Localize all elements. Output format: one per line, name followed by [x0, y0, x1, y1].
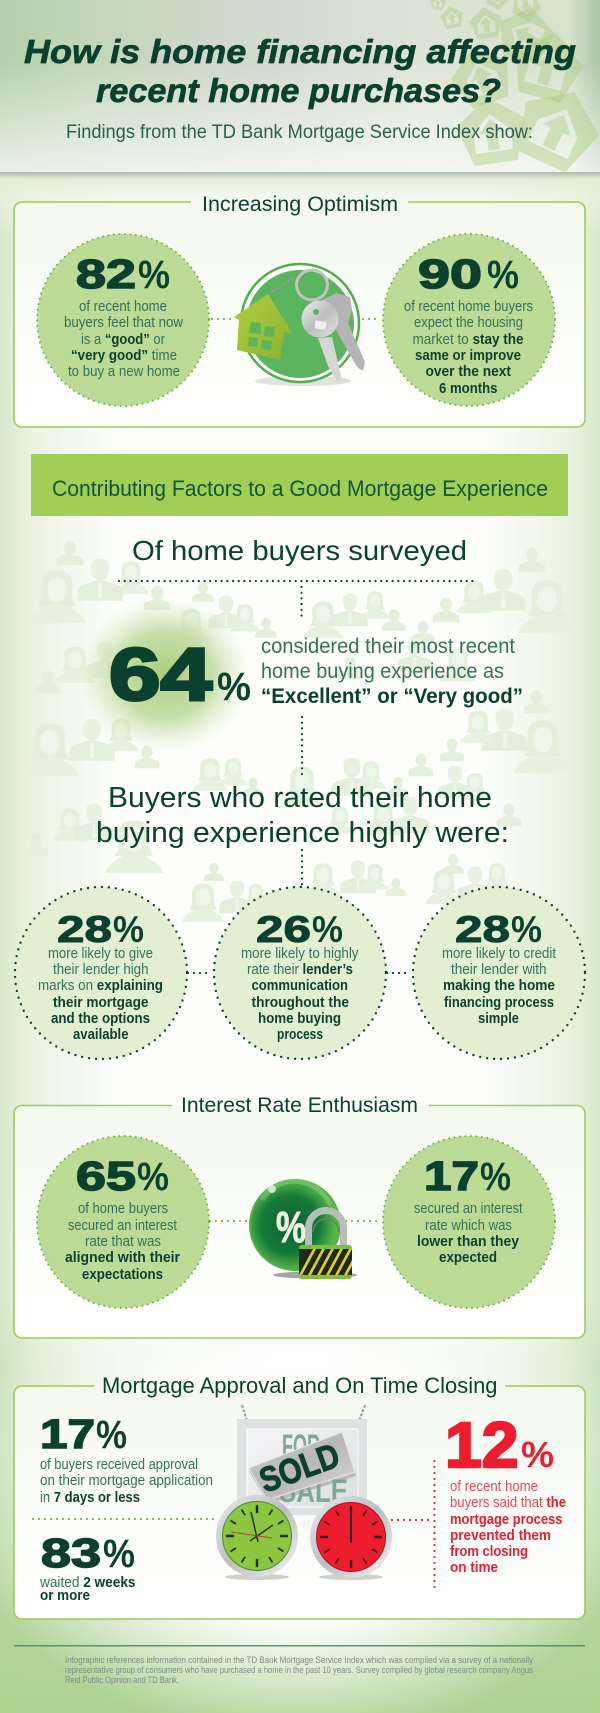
stat circle 90%: market to stay the — [412, 332, 524, 348]
stat 17%: in 7 days or less — [40, 1490, 140, 1506]
panel: increasing optimism — [14, 193, 585, 427]
factor circle 3: more likely to credit — [442, 946, 556, 962]
illustration: for sale sign with sold plate: SALE — [279, 1473, 348, 1509]
stat circle 82%: of recent home — [79, 299, 167, 315]
stat: 64 percent with glow: considered their most recent — [261, 635, 515, 658]
stat: 64 percent with glow: 64 — [109, 633, 212, 716]
stat 12%: mortgage process — [450, 1512, 562, 1528]
stat 12%: 12 — [445, 1409, 518, 1481]
dotted connector tree — [119, 581, 476, 888]
stat 12%: % — [521, 1434, 554, 1475]
stat 17%: on their mortgage application — [40, 1473, 213, 1489]
red connector dots — [392, 1461, 434, 1592]
factor circle 2: % — [312, 909, 343, 950]
stat circle 17%: expected — [439, 1250, 497, 1266]
factor circle 2: communication — [252, 978, 348, 994]
stat circle 82%: to buy a new home — [68, 364, 180, 380]
stat circle 90% — [383, 234, 555, 406]
stat circle 90%: 90 — [418, 251, 482, 297]
connector dots — [212, 318, 379, 320]
stat 12%: of recent home — [450, 1479, 538, 1495]
background crowd of people silhouettes — [21, 541, 576, 922]
stat circle 17%: rate which was — [425, 1218, 512, 1234]
divider dots — [33, 1518, 216, 1520]
footer rule — [14, 1645, 585, 1646]
stat 12%: from closing — [450, 1544, 528, 1560]
factor circle 3: making the home — [443, 978, 555, 994]
stat circle 82% — [37, 234, 209, 406]
stat circle 65%: of home buyers — [78, 1201, 168, 1217]
title: recent home purchases? — [96, 72, 501, 109]
stat circle 17%: 17 — [424, 1153, 479, 1199]
factor circle 2: 26 — [256, 909, 311, 950]
factor circle 3: simple — [478, 1011, 519, 1027]
factor circle 1: available — [73, 1027, 128, 1043]
factor circle 3: 28 — [455, 909, 510, 950]
connector dots — [210, 1220, 381, 1222]
factor circle 2: throughout the — [252, 995, 349, 1011]
factor circle 1: marks on explaining — [38, 978, 163, 994]
footer source note: Reid Public Opinion and TD Bank. — [65, 1675, 179, 1685]
stat 17%: of buyers received approval — [40, 1457, 198, 1473]
stat: 64 percent with glow: home buying experience as — [261, 660, 504, 683]
stat 12% — [445, 1409, 566, 1576]
stat circle 65%: % — [137, 1155, 169, 1199]
stat circle 82%: 82 — [76, 251, 136, 297]
icon: percent disc and padlock — [250, 1180, 357, 1279]
banner: contributing factors: Contributing Factors to a Good Mortgage Experience — [52, 476, 548, 501]
heading: buyers who rated — [96, 782, 509, 849]
stat 83%: % — [103, 1532, 135, 1576]
stat circle 65%: secured an interest — [68, 1218, 177, 1234]
factor circle 3: their lender with — [451, 962, 546, 978]
panel: mortgage approval and on time closing — [14, 1373, 585, 1619]
heading: Increasing Optimism — [202, 193, 398, 216]
heading: buyers who rated: Buyers who rated their home — [108, 782, 492, 814]
icon: percent disc and padlock: % — [276, 1203, 306, 1252]
stat circle 17% — [383, 1136, 555, 1308]
stat circle 90%: expect the housing — [414, 315, 523, 331]
stat: 64 percent with glow: “Excellent” or “Very good” — [261, 685, 523, 708]
stat circle 17%: % — [480, 1155, 511, 1199]
stat 83%: or more — [40, 1588, 90, 1604]
stat circle 65%: aligned with their — [65, 1250, 180, 1266]
factor circle 2 — [214, 887, 386, 1059]
factor circle 1: their lender high — [53, 962, 148, 978]
stat circle 90%: same or improve — [415, 348, 521, 364]
icon: green clock — [216, 1495, 298, 1580]
stat 17% — [40, 1411, 213, 1506]
heading: buyers who rated: buying experience highly were: — [96, 817, 509, 849]
factor circle 1: their mortgage — [53, 995, 148, 1011]
title: How is home financing affecting — [24, 33, 576, 70]
title — [24, 33, 576, 109]
banner: contributing factors — [31, 454, 568, 516]
icon: red clock — [310, 1496, 392, 1580]
factor circle 1: more likely to give — [48, 946, 153, 962]
stat 83% — [39, 1530, 136, 1604]
stat circle 90%: over the next — [426, 364, 511, 380]
stat circle 65%: expectations — [82, 1267, 163, 1283]
stat 12%: prevented them — [450, 1528, 551, 1544]
stat 83%: waited 2 weeks — [39, 1575, 136, 1591]
stat: 64 percent with glow: % — [217, 665, 251, 709]
factor circle 1 — [15, 887, 187, 1059]
factor circle 1: and the options — [51, 1011, 150, 1027]
stat 12%: buyers said that the — [450, 1495, 566, 1511]
factor circle 3: financing process — [444, 995, 554, 1011]
stat circle 65% — [37, 1136, 209, 1308]
stat circle 82%: “very good” time — [71, 348, 177, 364]
stat 12%: on time — [450, 1560, 498, 1576]
heading: of home buyers surveyed: Of home buyers surveyed — [132, 535, 467, 566]
stat circle 90%: % — [487, 253, 519, 297]
stat circle 65%: rate that was — [85, 1234, 161, 1250]
connector dots between factor circles — [188, 972, 411, 974]
footer source note: Infographic references information contained in the TD Bank Mortgage Service Index which was compiled via a survey of a nationally — [65, 1655, 533, 1665]
stat circle 82%: % — [138, 253, 170, 297]
heading: Interest Rate Enthusiasm — [181, 1094, 418, 1117]
illustration: for sale sign with sold plate: SOLD — [254, 1436, 345, 1501]
header band — [0, 0, 600, 179]
heading: Mortgage Approval and On Time Closing — [102, 1373, 498, 1398]
stat: 64 percent with glow — [79, 597, 523, 753]
stat 17%: % — [96, 1413, 127, 1457]
stat circle 65%: 65 — [76, 1153, 136, 1199]
stat circle 82%: is a “good” or — [81, 332, 165, 348]
factor circle 2: process — [277, 1027, 323, 1043]
stat circle 90%: of recent home buyers — [404, 299, 533, 315]
panel: interest rate enthusiasm — [14, 1094, 585, 1338]
illustration: for sale sign with sold plate: FOR — [282, 1428, 320, 1464]
house icons decoration — [430, 0, 600, 179]
stat 17%: 17 — [40, 1411, 95, 1457]
subtitle: Findings from the TD Bank Mortgage Service Index show: — [66, 121, 533, 143]
stat circle 82%: buyers feel that now — [64, 315, 183, 331]
factor circle 2: rate their lender’s — [247, 962, 353, 978]
factor circle 2: home buying — [258, 1011, 341, 1027]
stat circle 17%: secured an interest — [414, 1201, 522, 1217]
factor circle 3: % — [511, 909, 542, 950]
illustration: for sale sign with sold plate — [237, 1405, 367, 1515]
stat circle 90%: 6 months — [439, 381, 498, 397]
stat 83%: 83 — [41, 1530, 101, 1576]
icon: house keychain and keys — [234, 264, 365, 386]
footer source note — [65, 1655, 533, 1685]
stat circle 17%: lower than they — [417, 1234, 519, 1250]
factor circle 2: more likely to highly — [241, 946, 359, 962]
factor circle 3 — [413, 887, 585, 1059]
factor circle 1: 28 — [57, 909, 112, 950]
factor circle 1: % — [113, 909, 144, 950]
